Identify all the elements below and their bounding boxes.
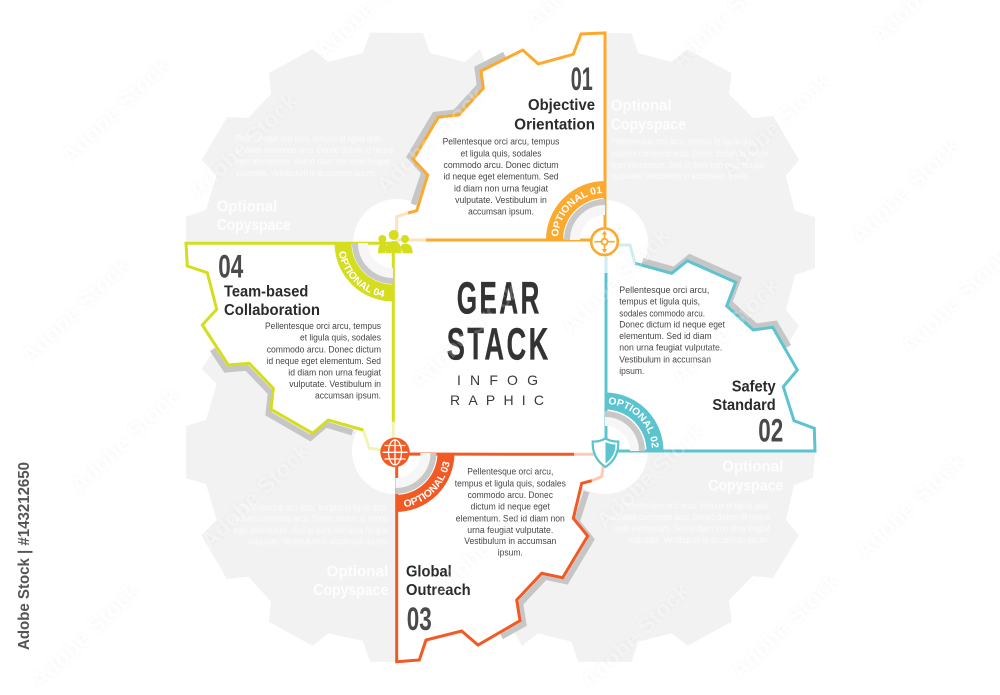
panel: 04 team-based collaboration: commodo arcu. Donec dictum: [267, 344, 381, 355]
panel: 02 safety standard: non urna feugiat vulputate.: [619, 343, 722, 354]
copyspace: top left: sodales commodo arcu. Donec dictum id neque: [236, 145, 394, 156]
copyspace: top left: Optional: [217, 199, 277, 216]
panel: 04 team-based collaboration: Collaboration: [224, 302, 320, 319]
center title: RAPHIC: [450, 392, 544, 408]
panel: 02 safety standard: sodales commodo arcu.: [619, 308, 705, 319]
panel: 02 safety standard: ipsum.: [619, 366, 644, 377]
panel: 01 objective orientation: Orientation: [514, 116, 595, 133]
panel: 02 safety standard: [604, 244, 817, 452]
panel: 01 objective orientation: Pellentesque orci arcu, tempus: [443, 137, 560, 148]
panel: 01 objective orientation: accumsan ipsum.: [468, 207, 534, 218]
panel: 03 global outreach: Pellentesque orci arcu,: [467, 467, 553, 478]
watermark: Adobe Stock: [405, 277, 525, 394]
panel: 03 global outreach: OPTIONAL 03: [404, 462, 450, 507]
copyspace: bottom left: Copyspace: [313, 582, 389, 599]
watermark: Adobe Stock: [850, 447, 970, 564]
copyspace: bottom right: [611, 459, 784, 546]
panel: 04 team-based collaboration: Pellentesque orci arcu, tempus: [265, 321, 381, 332]
copyspace: bottom right: sodales commodo arcu. Donec dictum id neque: [611, 512, 770, 523]
icon: compass target: [591, 228, 618, 255]
copyspace: top right: Optional: [611, 98, 672, 115]
watermark: Adobe Stock: [370, 82, 490, 199]
watermark: Adobe Stock: [425, 487, 545, 604]
panel: 01 objective orientation: 01: [571, 61, 593, 97]
copyspace: bottom right: eget elementum. Sed id diam non urna feugiat: [615, 523, 770, 534]
panel: 04 team-based collaboration: OPTIONAL 04: [339, 251, 384, 297]
panel: 01 objective orientation: Objective: [528, 97, 595, 114]
panel: 02 safety standard: Vestibulum in accumsan: [619, 354, 711, 365]
copyspace: bottom left: sodales commodo arcu. Donec dictum id neque: [231, 514, 388, 525]
copyspace: bottom left: Optional: [327, 564, 388, 581]
copyspace: bottom left: Pellentesque orci arcu, tempus et ligula quis,: [240, 502, 388, 513]
panel: 03 global outreach: [395, 452, 604, 664]
copyspace: bottom left: eget elementum. Sed id diam non urna feugiat: [233, 525, 389, 536]
icon: team people: [378, 230, 413, 253]
icon: shield: [593, 438, 618, 467]
stock id side label: Adobe Stock | #143212650: [16, 462, 33, 650]
panel: 04 team-based collaboration: id diam non urna feugiat: [288, 368, 381, 379]
icon: globe: [380, 438, 410, 467]
panel: 04 team-based collaboration: accumsan ipsum.: [315, 391, 381, 402]
panel: 01 objective orientation: et ligula quis, sodales: [460, 148, 542, 159]
panel: 02 safety standard: OPTIONAL 02: [608, 398, 659, 448]
panel: 03 global outreach: urna feugiat vulputate.: [467, 525, 553, 536]
panel: 01 objective orientation: [395, 31, 606, 242]
hub circles: [352, 199, 648, 494]
copyspace: bottom left: [231, 502, 389, 599]
watermark: Adobe Stock: [845, 132, 965, 249]
panel: 01 objective orientation: id diam non urna feugiat: [454, 183, 548, 194]
watermark: Adobe Stock: [590, 417, 710, 534]
copyspace: top right: vulputate. Vestibulum in accumsan ipsum.: [611, 171, 750, 182]
panel: 04 team-based collaboration: Team-based: [224, 284, 308, 301]
copyspace: bottom right: Optional: [722, 459, 783, 476]
background gear: [186, 33, 815, 662]
panel: 01 objective orientation: OPTIONAL 01: [552, 186, 602, 236]
watermark: Adobe Stock: [15, 252, 135, 369]
center title: [447, 272, 551, 408]
panel: 03 global outreach: dictum id neque eget: [471, 502, 550, 513]
panel: 01 objective orientation: id neque eget elementum. Sed: [444, 172, 558, 183]
watermark: Adobe Stock: [25, 577, 145, 694]
panel: 03 global outreach: commodo arcu. Donec: [468, 490, 553, 501]
panel: 02 safety standard: Pellentesque orci arcu,: [619, 285, 709, 296]
center title: INFOG: [457, 372, 538, 388]
copyspace: bottom left: vulputate. Vestibulum in accumsan ipsum.: [247, 537, 388, 548]
copyspace: top right: Copyspace: [611, 116, 686, 133]
copyspace: top left: vulputate. Vestibulum in accumsan ipsum.: [236, 168, 377, 179]
center panel: [393, 240, 606, 454]
watermark: Adobe Stock: [665, 272, 785, 389]
watermark: Adobe Stock: [55, 52, 175, 169]
panel: 01 objective orientation: vulputate. Vestibulum in: [455, 195, 547, 206]
panel: 03 global outreach: ipsum.: [498, 548, 523, 559]
copyspace: bottom right: Copyspace: [708, 478, 784, 495]
copyspace: top right: eget elementum. Sed id diam non urna feugiat: [611, 160, 765, 171]
panel: 03 global outreach: tempus et ligula quis, sodales: [455, 478, 566, 489]
panel: 02 safety standard: 02: [758, 413, 783, 449]
copyspace: top left: [217, 133, 394, 234]
panel: 04 team-based collaboration: et ligula quis, sodales: [300, 333, 381, 344]
center title: STACK: [447, 318, 551, 369]
copyspace: top right: [611, 98, 768, 182]
panel: 04 team-based collaboration: vulputate. Vestibulum in: [289, 379, 381, 390]
copyspace: bottom right: vulputate. Vestibulum in accumsan ipsum.: [628, 535, 770, 546]
panel: 04 team-based collaboration: [184, 242, 395, 452]
panel: 02 safety standard: elementum. Sed id diam: [619, 331, 712, 342]
watermark: Adobe Stock: [555, 222, 675, 339]
copyspace: top left: Copyspace: [217, 217, 291, 234]
watermark: Adobe Stock: [725, 567, 845, 684]
panel: 03 global outreach: elementum. Sed id diam non: [456, 513, 565, 524]
panel: 03 global outreach: Global: [406, 564, 452, 581]
watermark: Adobe Stock: [183, 87, 303, 204]
panel: 02 safety standard: Donec dictum id neque eget: [619, 319, 725, 330]
panel: 04 team-based collaboration: id neque eget elementum. Sed: [267, 356, 381, 367]
copyspace: top right: Pellentesque orci arcu, tempus et ligula quis,: [611, 137, 757, 148]
panel: 01 objective orientation: commodo arcu. Donec dictum: [444, 160, 559, 171]
panel: 03 global outreach: Outreach: [406, 582, 471, 599]
panel: 04 team-based collaboration: 04: [218, 249, 243, 285]
panel: 02 safety standard: Standard: [712, 397, 776, 414]
panel: 02 safety standard: tempus et ligula quis,: [619, 297, 700, 308]
panel: 03 global outreach: Vestibulum in accumsan: [464, 536, 556, 547]
copyspace: bottom right: Pellentesque orci arcu, tempus et ligula quis,: [621, 501, 770, 512]
copyspace: top left: eget elementum. Sed id diam non urna feugiat: [236, 156, 390, 168]
watermark: Adobe Stock: [575, 577, 695, 694]
watermark: Adobe Stock: [195, 437, 315, 554]
copyspace: top right: sodales commodo arcu. Donec dictum id neque: [611, 148, 768, 159]
panel: 02 safety standard: Safety: [732, 379, 776, 396]
panel: 03 global outreach: 03: [407, 601, 432, 637]
center title: GEAR: [457, 272, 542, 323]
watermark: Adobe Stock: [715, 67, 835, 184]
watermark: Adobe Stock: [65, 382, 185, 499]
copyspace: top left: Pellentesque orci arcu, tempus et ligula quis,: [236, 133, 383, 144]
